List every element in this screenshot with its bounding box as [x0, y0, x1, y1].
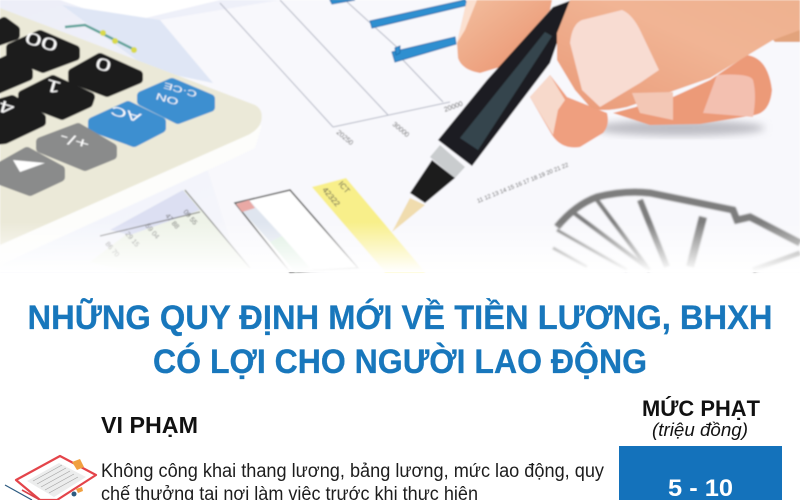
key labels: 00 — [23, 27, 60, 55]
fine amount box — [619, 446, 782, 500]
table on paper: 29 15 — [123, 231, 140, 249]
table on paper: 59 04 — [143, 223, 160, 241]
heading: mức phạt: MỨC PHẠT — [642, 396, 760, 421]
pie chart — [553, 192, 800, 270]
hand holding pen — [392, 0, 800, 232]
calculator — [0, 8, 262, 265]
paper sheet with chart grid: 20000 — [443, 101, 464, 114]
blue bar chart on paper — [330, 0, 468, 62]
table on paper: 09 55 — [181, 209, 198, 227]
calculator keys — [0, 22, 210, 191]
key labels: 0 — [93, 53, 114, 76]
key labels: C·CE — [162, 80, 198, 98]
pen — [392, 0, 572, 232]
icon: clipboard with pens — [5, 456, 96, 500]
small bordered box and yellow highlight: ICT — [336, 180, 352, 195]
title: CÓ LỢI CHO NGƯỜI LAO ĐỘNG — [153, 342, 647, 381]
photo: calculator, documents and hand with pen — [0, 0, 800, 272]
violation text: Không công khai thang lương, bảng lương, mức lao động, quy — [101, 461, 604, 482]
key labels: +/- — [58, 128, 92, 152]
table on paper: 86 70 — [103, 241, 120, 259]
table on paper: 47 88 — [163, 213, 180, 231]
heading: mức phạt — [642, 396, 760, 440]
title — [28, 299, 772, 381]
heading: vi phạm: VI PHẠM — [101, 412, 198, 438]
heading: mức phạt: (triệu đồng) — [652, 420, 748, 440]
paper sheet with chart grid: 20250 — [335, 129, 354, 147]
violation text — [101, 461, 604, 500]
key labels: AC — [109, 103, 143, 126]
white fade at bottom of photo — [0, 222, 800, 272]
paper sheet with chart grid: 11 12 13 14 15 16 17 18 19 20 21 22 — [477, 162, 570, 205]
paper sheet with chart grid — [60, 0, 800, 272]
table on paper — [90, 190, 250, 272]
key labels: ON — [154, 91, 180, 108]
title: NHỮNG QUY ĐỊNH MỚI VỀ TIỀN LƯƠNG, BHXH — [28, 299, 772, 337]
small bordered box and yellow highlight: 42322 — [320, 186, 342, 209]
key labels: 1 — [43, 75, 64, 98]
small bordered box and yellow highlight — [235, 178, 425, 272]
key labels — [0, 27, 198, 152]
paper sheet with chart grid: 30000 — [391, 121, 410, 139]
